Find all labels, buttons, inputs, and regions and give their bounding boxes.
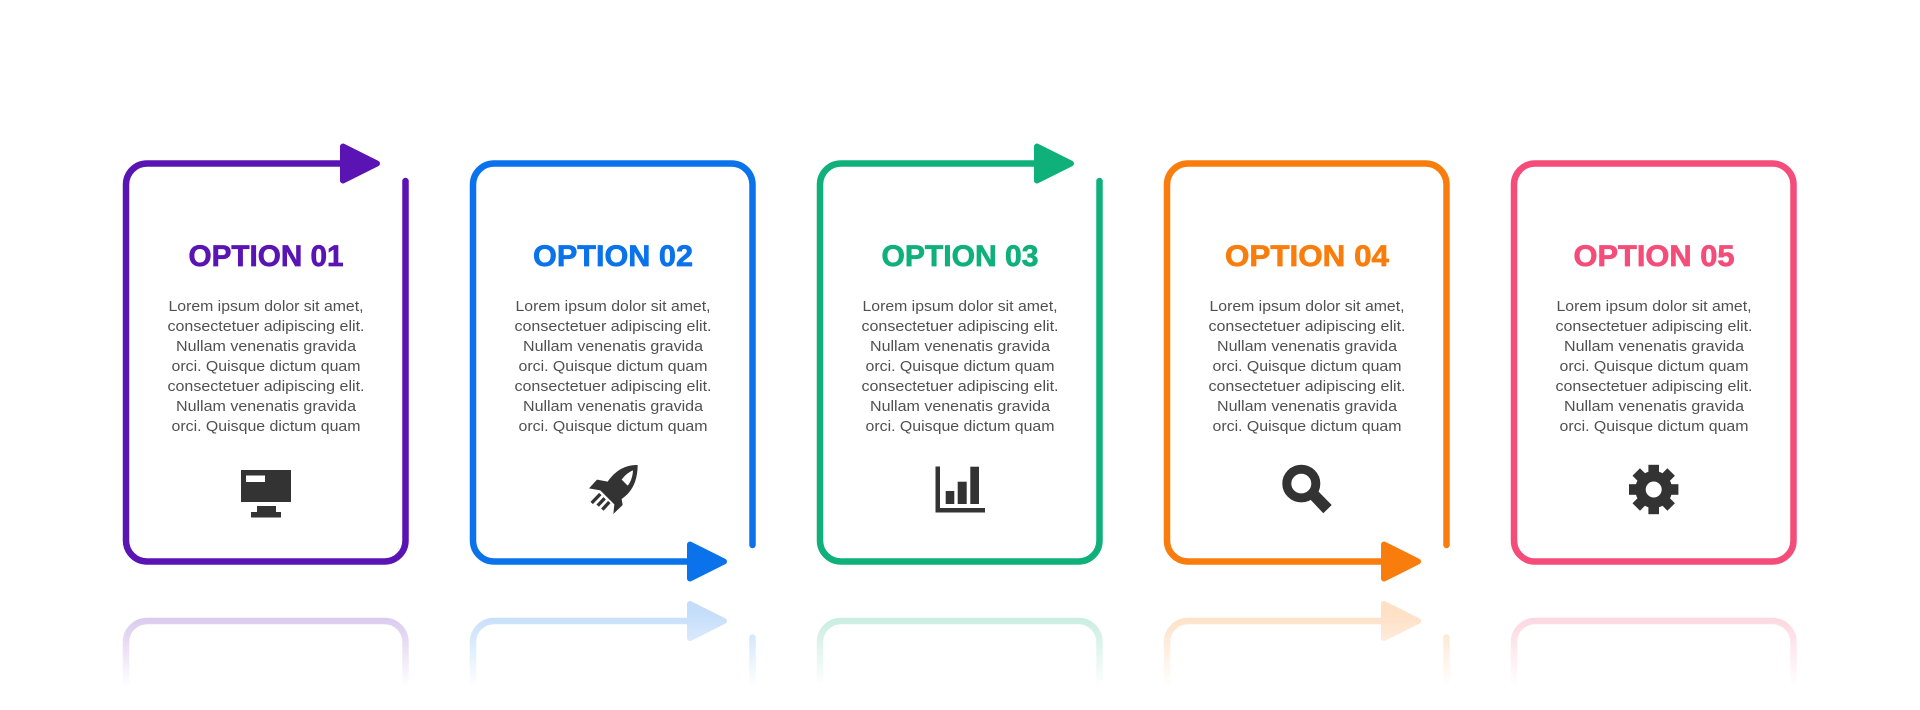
text block: option 04: orci. Quisque dictum quam <box>1212 358 1402 375</box>
frame with arrow: option 01 <box>126 146 406 562</box>
text block: option 04: Nullam venenatis gravida <box>1217 338 1398 355</box>
icon: bar chart <box>936 466 985 512</box>
frame: option 05 <box>1514 164 1794 562</box>
heading: option 02: OPTION 02 <box>533 240 693 273</box>
text block: option 04: Lorem ipsum dolor sit amet, <box>1210 298 1404 315</box>
icon: magnifying glass <box>1287 469 1332 513</box>
text block: option 05: Nullam venenatis gravida <box>1564 398 1745 415</box>
heading: option 05: OPTION 05 <box>1574 240 1734 273</box>
text block: option 05: consectetuer adipiscing elit. <box>1556 318 1752 335</box>
panel: option 02 <box>473 164 752 578</box>
heading: option 04: OPTION 04 <box>1225 240 1389 273</box>
text block: option 02: orci. Quisque dictum quam <box>518 358 708 375</box>
text block: option 01: Nullam venenatis gravida <box>176 398 357 415</box>
text block: option 03: Lorem ipsum dolor sit amet, <box>862 298 1058 315</box>
text block: option 05: Lorem ipsum dolor sit amet, <box>1556 298 1752 315</box>
text block: option 02: orci. Quisque dictum quam <box>518 418 708 435</box>
text block: option 01: orci. Quisque dictum quam <box>172 358 360 375</box>
panel: option 05 <box>1514 164 1794 562</box>
text block: option 02: Nullam venenatis gravida <box>523 398 704 415</box>
text block: option 04: consectetuer adipiscing elit. <box>1208 318 1406 335</box>
text block: option 01: consectetuer adipiscing elit. <box>168 378 364 395</box>
icon: monitor <box>241 470 291 518</box>
text block: option 03 <box>862 298 1058 435</box>
text block: option 05: orci. Quisque dictum quam <box>1560 418 1748 435</box>
text block: option 01: Nullam venenatis gravida <box>176 338 357 355</box>
text block: option 02: consectetuer adipiscing elit. <box>514 378 712 395</box>
panel: option 01 <box>126 146 406 562</box>
heading: option 03: OPTION 03 <box>882 240 1038 273</box>
text block: option 03: orci. Quisque dictum quam <box>866 358 1054 375</box>
text block: option 01 <box>168 298 364 435</box>
text block: option 05: orci. Quisque dictum quam <box>1560 358 1748 375</box>
text block: option 02: Nullam venenatis gravida <box>523 338 704 355</box>
text block: option 04: Nullam venenatis gravida <box>1217 398 1398 415</box>
text block: option 02: consectetuer adipiscing elit. <box>514 318 712 335</box>
icon: rocket <box>589 465 638 514</box>
text block: option 01: orci. Quisque dictum quam <box>172 418 360 435</box>
text block: option 03: orci. Quisque dictum quam <box>866 418 1054 435</box>
icon: gear <box>1629 465 1678 514</box>
text block: option 04: consectetuer adipiscing elit. <box>1208 378 1406 395</box>
frame with arrow: option 03 <box>820 146 1100 562</box>
text block: option 05 <box>1556 298 1752 435</box>
text block: option 04 <box>1208 298 1406 435</box>
heading: option 01: OPTION 01 <box>188 240 344 273</box>
panel: option 04 <box>1167 164 1446 578</box>
text block: option 03: Nullam venenatis gravida <box>870 338 1051 355</box>
text block: option 02: Lorem ipsum dolor sit amet, <box>516 298 710 315</box>
frame with arrow: option 02 <box>473 164 752 578</box>
text block: option 03: consectetuer adipiscing elit. <box>862 378 1058 395</box>
reflection under panels <box>122 601 1797 676</box>
text block: option 02 <box>514 298 712 435</box>
text block: option 05: Nullam venenatis gravida <box>1564 338 1745 355</box>
text block: option 01: Lorem ipsum dolor sit amet, <box>168 298 364 315</box>
text block: option 03: Nullam venenatis gravida <box>870 398 1051 415</box>
text block: option 03: consectetuer adipiscing elit. <box>862 318 1058 335</box>
frame with arrow: option 04 <box>1167 164 1446 578</box>
text block: option 01: consectetuer adipiscing elit. <box>168 318 364 335</box>
text block: option 04: orci. Quisque dictum quam <box>1212 418 1402 435</box>
text block: option 05: consectetuer adipiscing elit. <box>1556 378 1752 395</box>
panel: option 03 <box>820 146 1100 562</box>
